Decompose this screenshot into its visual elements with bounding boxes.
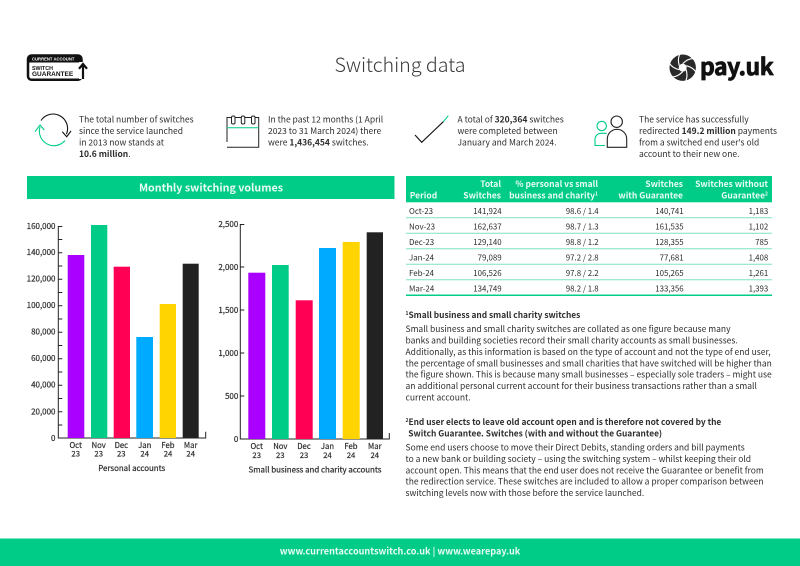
table header: 1 — [595, 190, 598, 197]
bar chart: personal accounts: Dec — [115, 440, 128, 451]
row: Jan-24: 1,408 — [749, 253, 768, 264]
stat: total switches: 10.6 million. — [79, 148, 131, 160]
row: Feb-24: 106,526 — [473, 268, 502, 279]
bar chart: personal accounts: 20,000 — [31, 406, 56, 418]
stat: quarter switches: A total of 320,364 switches — [458, 114, 564, 126]
stat: redirected payments: from a switched end user's old — [639, 136, 759, 148]
bar chart: personal accounts: 23 — [117, 448, 126, 460]
stat: quarter switches — [458, 114, 564, 148]
bar chart: personal accounts: 24 — [140, 448, 150, 460]
table header: % personal vs small — [515, 178, 598, 190]
bar chart: small business and charity accounts — [218, 219, 389, 476]
note 2: end user leaves old account open: Switch Guarantee. Switches (with and without the Guarantee) — [408, 427, 662, 439]
row: Oct-23: Oct-23 — [409, 206, 433, 217]
bar chart: personal accounts: 100,000 — [27, 300, 56, 311]
row: Oct-23: 1,183 — [749, 206, 768, 217]
icon: pay.uk logo: pay.uk — [700, 48, 774, 82]
stat: quarter switches: January and March 2024. — [458, 136, 557, 148]
panel heading: monthly switching volumes: Monthly switching volumes — [139, 180, 283, 196]
bar chart: personal accounts: 160,000 — [27, 221, 56, 232]
bar chart: small business and charity accounts: 1,500 — [218, 305, 239, 316]
note 1: small business and small charity switches: the percentage of small businesses and small charities that have switched will be higher than — [406, 357, 772, 369]
row: Oct-23: 140,741 — [655, 206, 684, 217]
note 1: small business and small charity switches: current account. — [406, 392, 471, 404]
note 2: end user leaves old account open: End user elects to leave old account open and is therefore not covered by the — [408, 416, 721, 428]
table header: Switches without — [695, 178, 768, 190]
row: Jan-24: 79,089 — [478, 253, 502, 264]
table: switching data by period — [406, 176, 772, 295]
icon: pay.uk logo — [669, 48, 774, 83]
bar chart: personal accounts: Personal accounts — [98, 463, 166, 474]
note 2: end user leaves old account open: to a new bank or building society – using the switching system – whilst keeping their old — [406, 453, 751, 465]
bar chart: personal accounts: Nov — [92, 440, 106, 451]
bar chart: small business and charity accounts: Mar — [368, 441, 382, 452]
row: Nov-23: 161,535 — [655, 222, 684, 233]
table header: with Guarantee — [618, 189, 683, 201]
icon: current account switch guarantee logo: GUARANTEE — [32, 71, 74, 78]
note 1: small business and small charity switches: the figure shown. This is because many small businesses – especially sole traders – might use — [406, 369, 772, 381]
bar chart: personal accounts: Mar — [184, 440, 197, 451]
stat: redirected payments — [639, 114, 777, 160]
stat: past 12 months: were 1,436,454 switches. — [268, 136, 369, 148]
title: Switching data — [334, 49, 466, 78]
stat: past 12 months — [268, 114, 384, 148]
note 2: end user leaves old account open — [406, 416, 764, 499]
bar chart: personal accounts: 60,000 — [31, 353, 56, 364]
bar chart: small business and charity accounts: 2,000 — [218, 262, 239, 273]
row: Nov-23: 1,102 — [749, 222, 768, 233]
bar chart: personal accounts: 23 — [94, 448, 103, 460]
note 2: end user leaves old account open: 2 — [406, 417, 408, 424]
row: Nov-23 — [409, 222, 768, 233]
stat: redirected payments: account to their new one. — [639, 148, 739, 160]
row: Jan-24: Jan-24 — [409, 253, 435, 264]
row: Oct-23: 141,924 — [473, 206, 502, 217]
row: Dec-23: Dec-23 — [409, 237, 434, 248]
bar chart: small business and charity accounts: Feb — [344, 441, 358, 452]
row: Feb-24: 105,265 — [655, 268, 684, 279]
stat: total switches — [79, 114, 194, 160]
bar chart: personal accounts: 120,000 — [27, 274, 56, 285]
bar chart: personal accounts: 24 — [186, 448, 196, 460]
bar chart: small business and charity accounts: 2,500 — [218, 219, 239, 230]
panel heading: monthly switching volumes — [27, 176, 394, 199]
bar chart: small business and charity accounts: Dec — [297, 441, 311, 452]
bar chart: small business and charity accounts: 24 — [371, 450, 380, 461]
note 2: end user leaves old account open: Some end users choose to move their Direct Debits, standing orders and bill payments — [406, 442, 745, 454]
bar chart: personal accounts: Feb — [161, 440, 175, 451]
bar chart: personal accounts: 24 — [164, 448, 173, 460]
row: Feb-24 — [409, 268, 768, 279]
row: Jan-24: 97.2 / 2.8 — [566, 253, 599, 264]
row: Mar-24: 98.2 / 1.8 — [566, 283, 599, 294]
bar chart: small business and charity accounts: 0 — [234, 434, 239, 445]
stat: total switches: in 2013 now stands at — [79, 136, 165, 148]
table header: Period — [410, 189, 437, 201]
bar chart: personal accounts: 23 — [71, 448, 80, 460]
row: Nov-23: 98.7 / 1.3 — [566, 222, 599, 233]
bar chart: small business and charity accounts: 1,000 — [218, 348, 239, 359]
bar chart: small business and charity accounts: Jan — [321, 441, 334, 452]
table header: business and charity — [509, 189, 595, 201]
table header — [406, 176, 772, 202]
bar chart: personal accounts: 40,000 — [31, 380, 56, 391]
row: Nov-23: Nov-23 — [409, 222, 435, 233]
bar chart: personal accounts: Oct — [69, 440, 82, 451]
row: Jan-24 — [409, 253, 768, 264]
note 1: small business and small charity switches: an additional personal current account for their business transactions rather than a small — [406, 380, 757, 392]
row: Dec-23 — [409, 237, 768, 248]
icon: two people — [595, 116, 627, 147]
icon: tick — [415, 116, 448, 142]
row: Oct-23 — [409, 206, 768, 217]
row: Dec-23: 98.8 / 1.2 — [566, 237, 599, 248]
table header: Switches — [645, 178, 683, 190]
bar chart: small business and charity accounts: 23 — [300, 450, 308, 461]
stat: quarter switches: were completed between — [458, 125, 558, 137]
stat: past 12 months: 2023 to 31 March 2024) there — [268, 125, 381, 137]
icon: current account switch guarantee logo: CURRENT ACCOUNT — [32, 57, 75, 62]
row: Mar-24: Mar-24 — [409, 283, 435, 294]
note 2: end user leaves old account open: the redirection service. These switches are included to allow a proper comparison between — [406, 476, 764, 488]
stat: total switches: since the service launched — [79, 125, 183, 137]
footer: www.currentaccountswitch.co.uk | www.wearepay.uk — [280, 544, 521, 558]
row: Dec-23: 128,355 — [655, 237, 684, 248]
row: Mar-24: 134,749 — [473, 283, 502, 294]
footer — [0, 538, 800, 566]
bar chart: personal accounts: 0 — [51, 433, 56, 444]
bar chart: personal accounts: 80,000 — [31, 327, 56, 338]
note 1: small business and small charity switches: 1 — [406, 310, 408, 317]
stat: redirected payments: The service has successfully — [639, 114, 749, 126]
row: Dec-23: 785 — [755, 237, 768, 248]
row: Feb-24: 1,261 — [749, 268, 768, 279]
note 1: small business and small charity switches: banks and building societies record their small charity accounts as small businesses. — [406, 334, 738, 346]
note 2: end user leaves old account open: account open. This means that the end user does not receive the Guarantee or benefit from — [406, 464, 764, 476]
bar chart: small business and charity accounts: 24 — [347, 450, 356, 461]
note 1: small business and small charity switches — [406, 309, 772, 404]
row: Dec-23: 129,140 — [473, 237, 502, 248]
row: Oct-23: 98.6 / 1.4 — [566, 206, 599, 217]
table header: 2 — [765, 190, 768, 197]
icon: current account switch guarantee logo: SWITCH — [32, 66, 53, 72]
row: Mar-24: 1,393 — [749, 283, 768, 294]
icon: current account switch guarantee logo — [28, 56, 87, 80]
row: Feb-24: 97.8 / 2.2 — [566, 268, 599, 279]
note 2: end user leaves old account open: switching levels now with those before the service launched. — [406, 487, 644, 499]
row: Mar-24 — [409, 283, 768, 294]
bar chart: small business and charity accounts: 23 — [252, 450, 261, 461]
row: Feb-24: Feb-24 — [409, 268, 435, 279]
row: Jan-24: 77,681 — [660, 253, 684, 264]
row: Nov-23: 162,637 — [473, 222, 502, 233]
bar chart: small business and charity accounts: 23 — [276, 450, 285, 461]
row: Mar-24: 133,356 — [655, 283, 684, 294]
icon: switching cycle arrows — [35, 114, 71, 146]
bar chart: small business and charity accounts: 24 — [323, 450, 332, 461]
stat: past 12 months: In the past 12 months (1 April — [268, 114, 384, 126]
bar chart: small business and charity accounts: Small business and charity accounts — [249, 465, 382, 476]
note 1: small business and small charity switches: Small business and small charity switches are collated as one figure because many — [406, 323, 731, 335]
bar chart: small business and charity accounts: 500 — [225, 391, 239, 402]
bar chart: personal accounts: Jan — [138, 440, 152, 451]
note 1: small business and small charity switches: Additionally, as this information is based on the type of account and not the type of end user, — [406, 346, 771, 358]
table header: Total — [480, 178, 501, 190]
stat: total switches: The total number of switches — [79, 114, 194, 126]
note 1: small business and small charity switches: Small business and small charity switches — [408, 309, 580, 321]
bar chart: personal accounts — [27, 221, 206, 474]
bar chart: small business and charity accounts: Oct — [250, 441, 263, 452]
bar chart: small business and charity accounts: Nov — [273, 441, 287, 452]
stat: redirected payments: redirected 149.2 million payments — [639, 125, 777, 137]
table header: Switches — [463, 189, 501, 201]
bar chart: personal accounts: 140,000 — [27, 247, 56, 258]
table header: Guarantee — [721, 189, 765, 201]
icon: calendar — [227, 116, 259, 147]
